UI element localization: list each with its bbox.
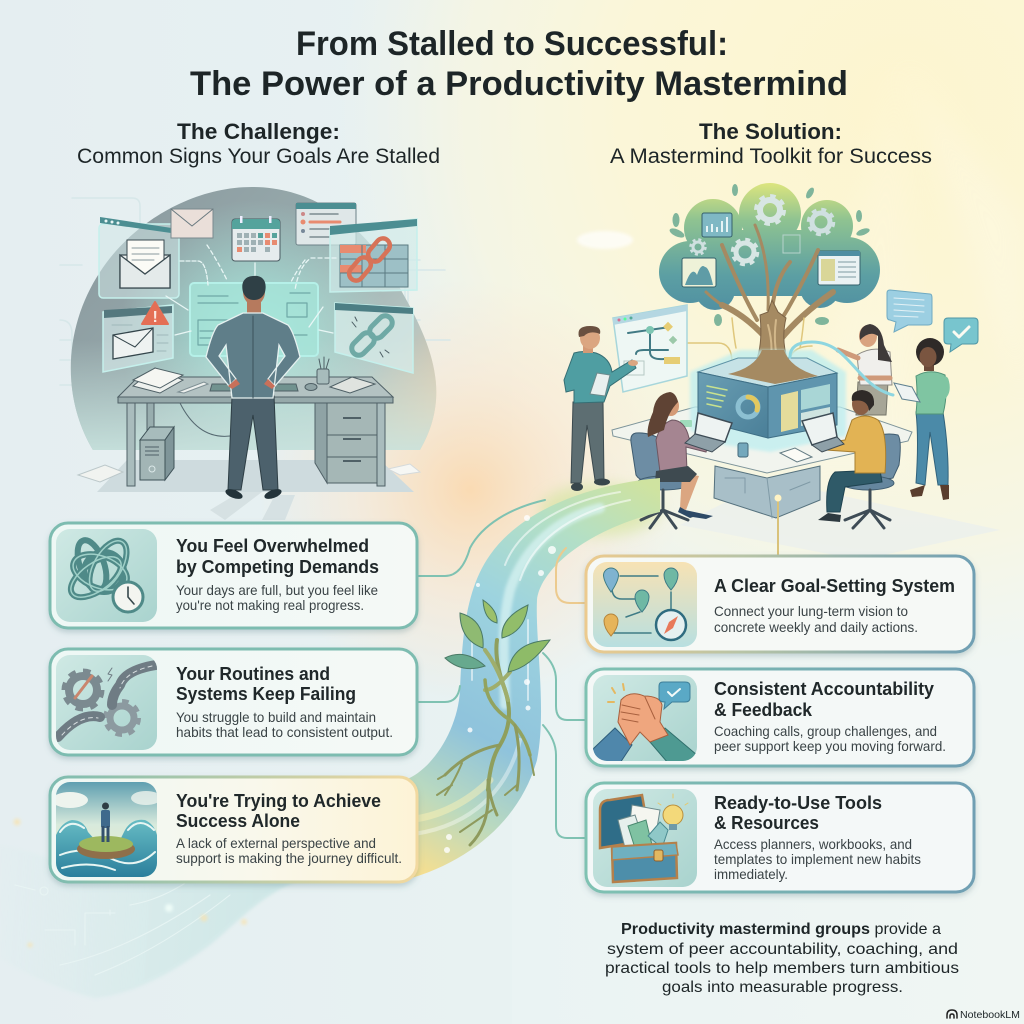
sprout leaves bbox=[445, 600, 550, 672]
trunk and branches bbox=[706, 225, 833, 340]
central data box bbox=[690, 350, 846, 452]
green path glow bbox=[540, 484, 660, 536]
window: email with alert: ! bbox=[152, 309, 158, 326]
top envelope bbox=[171, 209, 213, 238]
summary text: Productivity mastermind groups provide a bbox=[621, 921, 941, 938]
list window bbox=[296, 203, 356, 245]
tree crown bbox=[659, 183, 880, 310]
card text: templates to implement new habits bbox=[714, 851, 921, 867]
central screen bbox=[190, 283, 318, 356]
card text: Systems Keep Failing bbox=[176, 684, 356, 704]
summary text: system of peer accountability, coaching, and bbox=[607, 941, 958, 958]
light streaks bbox=[504, 508, 600, 705]
card text: You Feel Overwhelmed bbox=[176, 536, 369, 556]
heading: the solution: A Mastermind Toolkit for Success bbox=[610, 145, 932, 168]
crown widgets bbox=[682, 196, 860, 287]
heading: the solution: The Solution: bbox=[699, 119, 842, 144]
floating cloud bbox=[577, 231, 633, 249]
card: goal setting bbox=[586, 556, 974, 652]
cup and notes on table bbox=[680, 420, 812, 462]
title bbox=[190, 25, 848, 103]
illustration: overwhelmed worker at desk bbox=[60, 187, 450, 520]
seated man bbox=[818, 390, 900, 528]
sprout stems and roots bbox=[437, 640, 534, 845]
card text bbox=[714, 793, 921, 882]
card text: Access planners, workbooks, and bbox=[714, 836, 912, 852]
card text: Ready-to-Use Tools bbox=[714, 793, 882, 813]
card text: You're Trying to Achieve bbox=[176, 791, 381, 811]
flowing river with sprout bbox=[405, 478, 782, 880]
dashed flow arrows bbox=[166, 245, 336, 335]
card text bbox=[714, 679, 946, 754]
card: overwhelmed bbox=[50, 523, 417, 628]
heading: the challenge bbox=[77, 119, 440, 168]
card text bbox=[176, 664, 393, 740]
seated woman bbox=[631, 392, 713, 528]
computer tower bbox=[140, 427, 174, 440]
title: From Stalled to Successful: bbox=[296, 25, 728, 63]
icon: tangled knot with clock bbox=[56, 529, 157, 622]
speech bubble: text bbox=[887, 290, 932, 332]
title: The Power of a Productivity Mastermind bbox=[190, 65, 848, 103]
lower left river band bbox=[0, 818, 300, 998]
ribbon of ideas bbox=[790, 342, 893, 395]
card text: You struggle to build and maintain bbox=[176, 709, 376, 725]
card: alone bbox=[50, 777, 417, 882]
small leaves bbox=[668, 184, 871, 326]
standing woman with tablet bbox=[894, 338, 949, 500]
speech bubble: check bbox=[944, 318, 978, 352]
window: broken chain over table bbox=[330, 219, 417, 292]
left laptop bbox=[685, 413, 732, 452]
connectors from tree to people bbox=[688, 318, 812, 378]
card text: & Resources bbox=[714, 813, 819, 833]
icon: map pins and compass bbox=[593, 562, 697, 647]
connectors bbox=[418, 500, 587, 838]
card text: Success Alone bbox=[176, 811, 300, 831]
desk items bbox=[133, 357, 375, 393]
man from behind bbox=[206, 276, 300, 501]
card text bbox=[714, 576, 955, 635]
card text: peer support keep you moving forward. bbox=[714, 738, 946, 754]
heading: the challenge: The Challenge: bbox=[177, 119, 340, 144]
window: email with alert bbox=[103, 302, 173, 372]
heading: the challenge: Common Signs Your Goals Are Stalled bbox=[77, 145, 440, 168]
icon: treasure chest and light bulb bbox=[593, 789, 697, 887]
faint circuit lines bbox=[60, 198, 450, 443]
summary text bbox=[605, 921, 959, 996]
desk bbox=[118, 377, 393, 397]
standing woman with ribbon bbox=[838, 324, 892, 415]
card text: & Feedback bbox=[714, 700, 813, 720]
card text: Consistent Accountability bbox=[714, 679, 934, 699]
card text: A lack of external perspective and bbox=[176, 835, 376, 851]
card text: Coaching calls, group challenges, and bbox=[714, 723, 937, 739]
card text: habits that lead to consistent output. bbox=[176, 724, 393, 740]
calendar bbox=[232, 216, 280, 261]
summary text: goals into measurable progress. bbox=[662, 979, 903, 996]
card text: you're not making real progress. bbox=[176, 597, 364, 613]
card: routines failing bbox=[50, 649, 417, 755]
card text: support is making the journey difficult. bbox=[176, 850, 402, 866]
meeting table bbox=[714, 466, 820, 518]
illustration: mastermind team around tree bbox=[540, 183, 1000, 560]
standing man with tablet bbox=[564, 326, 638, 491]
icon: person on island in waves bbox=[52, 782, 161, 877]
card text bbox=[176, 791, 402, 866]
card text: A Clear Goal-Setting System bbox=[714, 576, 955, 596]
card text: Your Routines and bbox=[176, 664, 330, 684]
right laptop bbox=[802, 413, 844, 452]
heading: the solution bbox=[610, 119, 932, 168]
NotebookLM mark: NotebookLM bbox=[960, 1009, 1020, 1021]
card text: immediately. bbox=[714, 866, 788, 882]
card text: concrete weekly and daily actions. bbox=[714, 619, 918, 635]
card text: Connect your lung-term vision to bbox=[714, 603, 908, 619]
floor papers bbox=[78, 465, 123, 482]
icon: broken gears and road bbox=[56, 655, 157, 750]
card text: Your days are full, but you feel like bbox=[176, 582, 378, 598]
whiteboard panel bbox=[613, 305, 687, 392]
summary text: practical tools to help members turn ambitious bbox=[605, 960, 959, 977]
window: open envelope bbox=[99, 217, 179, 298]
card: accountability bbox=[586, 669, 974, 766]
floor bbox=[97, 460, 414, 492]
icon: clasped hands and check bubble bbox=[593, 675, 697, 763]
dome bbox=[71, 187, 436, 450]
card text bbox=[176, 536, 379, 613]
card: tools bbox=[586, 783, 974, 892]
window: teal chain bbox=[335, 303, 413, 373]
card text: by Competing Demands bbox=[176, 557, 379, 577]
